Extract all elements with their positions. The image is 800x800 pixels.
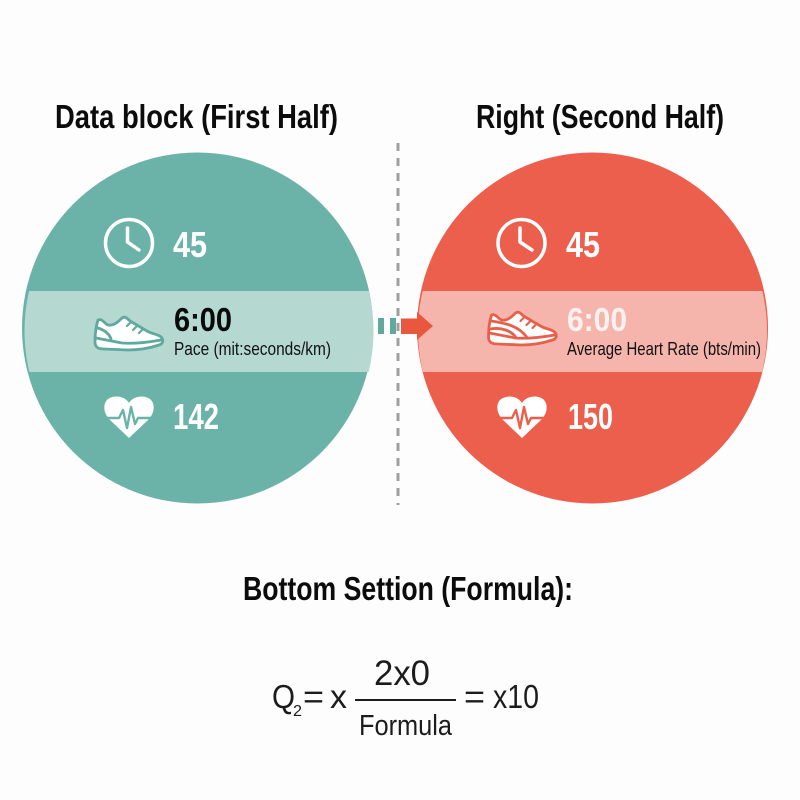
icon: clock (498, 220, 545, 266)
label: pace: Pace (mit:seconds/km) (174, 339, 331, 359)
title: second half: Right (Second Half) (476, 98, 724, 135)
band: heart rate row (418, 291, 767, 372)
value: heart rate: 150 (568, 396, 613, 437)
value: time: 45 (566, 224, 600, 265)
band: pace row (24, 291, 374, 372)
formula: x (330, 678, 348, 715)
formula (272, 654, 539, 742)
heading: formula section: Bottom Settion (Formula): (243, 570, 573, 607)
formula: x10 (493, 678, 539, 715)
formula: 2 (293, 703, 302, 720)
icon: running shoe (95, 317, 163, 350)
title: first half: Data block (First Half) (55, 98, 338, 135)
icon: heart (497, 397, 547, 438)
formula: Formula (359, 710, 453, 742)
dashed divider (396, 143, 400, 505)
value: time: 45 (173, 224, 207, 265)
value: pace: 6:00 (567, 301, 627, 338)
arrow: first half to second half (378, 312, 433, 340)
formula: Q (272, 678, 295, 715)
formula: = (464, 678, 485, 715)
value: heart rate: 142 (173, 396, 219, 437)
icon: heart (104, 397, 154, 438)
value: pace: 6:00 (174, 301, 232, 338)
icon: clock (106, 220, 152, 266)
panel: second half circle (417, 152, 768, 506)
icon: running shoe (488, 312, 556, 345)
panel: first half circle (22, 152, 374, 506)
formula: = (303, 678, 324, 715)
label: average heart rate: Average Heart Rate (bts/min) (567, 339, 761, 359)
formula: 2x0 (374, 654, 430, 693)
